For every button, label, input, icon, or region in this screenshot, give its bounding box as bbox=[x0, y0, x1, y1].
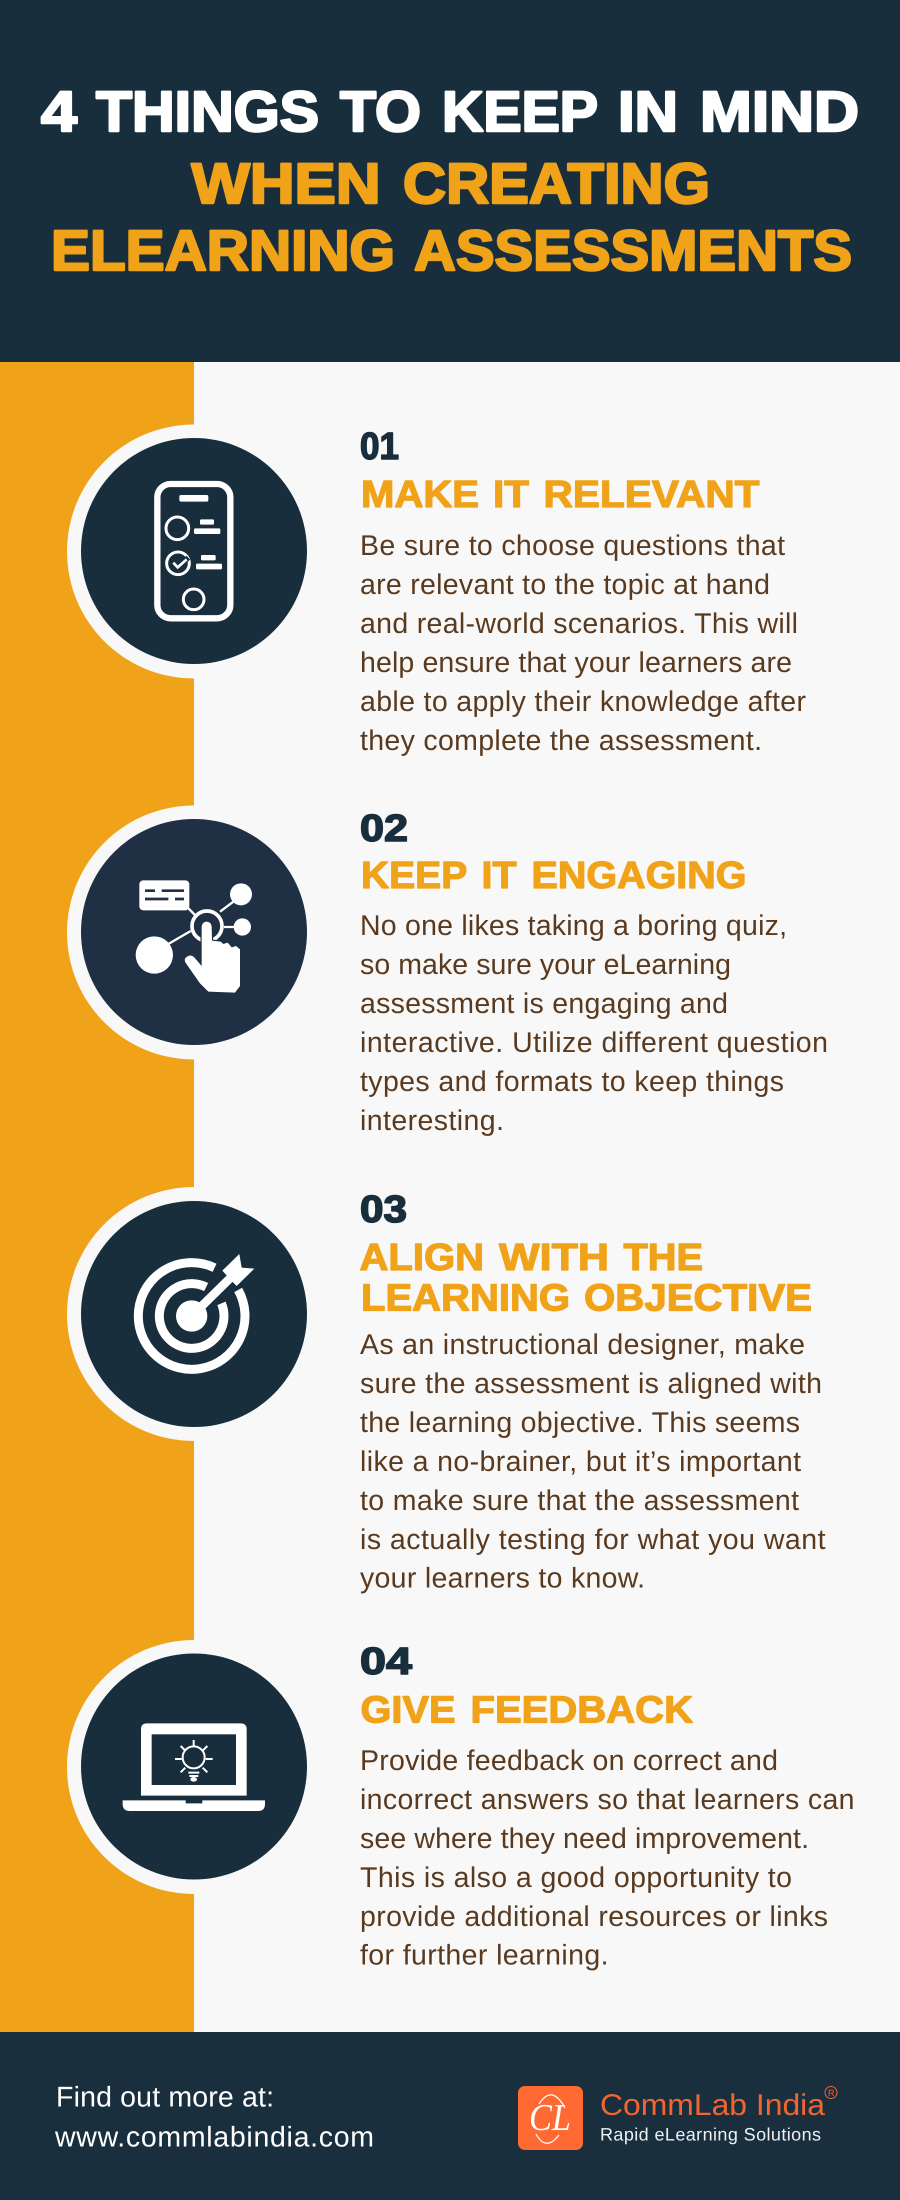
text block: align with the learning objective: to make sure that the assessment bbox=[360, 1485, 799, 1517]
heading: align with the learning objective: WITH bbox=[499, 1237, 609, 1279]
text block: align with the learning objective bbox=[360, 1329, 826, 1594]
text block: give feedback: incorrect answers so that learners can bbox=[360, 1784, 854, 1816]
panel: 01 make it relevant bbox=[67, 424, 806, 757]
panel: 02 keep it engaging bbox=[67, 806, 828, 1137]
footer link text: www.commlabindia.com bbox=[54, 2122, 374, 2154]
footer link text: Find out more at: bbox=[56, 2082, 274, 2114]
text block: make it relevant bbox=[360, 530, 806, 757]
heading: align with the learning objective bbox=[360, 1237, 812, 1320]
icon: CL badge bbox=[518, 2086, 583, 2150]
text block: give feedback bbox=[360, 1745, 854, 1972]
icon: CL badge: CL bbox=[529, 2097, 571, 2139]
text block: align with the learning objective: your learners to know. bbox=[360, 1562, 645, 1594]
text block: align with the learning objective: the learning objective. This seems bbox=[360, 1407, 800, 1439]
icon: phone quiz checklist bbox=[67, 424, 321, 678]
heading: align with the learning objective: LEARNING bbox=[361, 1278, 570, 1320]
number 03: 03 bbox=[360, 1189, 407, 1231]
text block: align with the learning objective: sure the assessment is aligned with bbox=[360, 1368, 822, 1400]
heading: keep it engaging: IT bbox=[482, 855, 516, 897]
text block: make it relevant: able to apply their knowledge after bbox=[360, 686, 806, 718]
text block: keep it engaging: assessment is engaging and bbox=[360, 988, 728, 1020]
text block: make it relevant: help ensure that your learners are bbox=[360, 647, 792, 679]
text block: keep it engaging: interactive. Utilize different question bbox=[360, 1027, 828, 1059]
title bbox=[41, 80, 859, 283]
registered mark bbox=[825, 2086, 837, 2098]
heading: align with the learning objective: OBJECTIVE bbox=[584, 1278, 812, 1320]
panel: 04 give feedback bbox=[67, 1640, 854, 1972]
text block: keep it engaging: No one likes taking a boring quiz, bbox=[360, 910, 787, 942]
text block: align with the learning objective: is actually testing for what you want bbox=[360, 1524, 826, 1556]
text block: make it relevant: they complete the assessment. bbox=[360, 725, 762, 757]
text block: give feedback: Provide feedback on correct and bbox=[360, 1745, 778, 1777]
title: WHEN bbox=[192, 152, 380, 216]
text block: give feedback: see where they need improvement. bbox=[360, 1823, 809, 1855]
title: MIND bbox=[700, 80, 859, 144]
panel: 03 align with the learning objective bbox=[67, 1187, 826, 1594]
title: IN bbox=[618, 80, 678, 144]
text block: make it relevant: and real-world scenarios. This will bbox=[360, 608, 798, 640]
text block: keep it engaging bbox=[360, 910, 828, 1137]
heading: keep it engaging: KEEP bbox=[361, 855, 467, 897]
title: KEEP bbox=[442, 80, 597, 144]
footer link text bbox=[54, 2082, 374, 2154]
heading: make it relevant: MAKE bbox=[361, 474, 479, 516]
heading: align with the learning objective: ALIGN bbox=[360, 1237, 484, 1279]
text block: keep it engaging: types and formats to keep things bbox=[360, 1066, 784, 1098]
icon: target with arrow bbox=[67, 1187, 321, 1441]
text block: keep it engaging: so make sure your eLearning bbox=[360, 949, 731, 981]
text block: align with the learning objective: As an instructional designer, make bbox=[360, 1329, 805, 1361]
title: ASSESSMENTS bbox=[414, 219, 852, 283]
title: TO bbox=[340, 80, 421, 144]
header banner bbox=[0, 0, 900, 362]
logo: CommLab India bbox=[518, 2086, 837, 2150]
heading: give feedback: GIVE bbox=[360, 1690, 456, 1732]
heading: align with the learning objective: THE bbox=[624, 1237, 703, 1279]
text block: align with the learning objective: like a no-brainer, but it’s important bbox=[360, 1446, 801, 1478]
text block: give feedback: for further learning. bbox=[360, 1940, 608, 1972]
icon: laptop with lightbulb bbox=[67, 1640, 321, 1894]
text block: make it relevant: are relevant to the topic at hand bbox=[360, 569, 770, 601]
brand name: CommLab India bbox=[600, 2089, 825, 2122]
heading: keep it engaging: ENGAGING bbox=[532, 855, 746, 897]
footer bbox=[0, 2032, 900, 2200]
text block: make it relevant: Be sure to choose questions that bbox=[360, 530, 785, 562]
icon: interactive hand tap network bbox=[67, 806, 321, 1060]
heading: make it relevant: RELEVANT bbox=[544, 474, 760, 516]
number 01: 01 bbox=[360, 426, 399, 468]
text block: keep it engaging: interesting. bbox=[360, 1105, 504, 1137]
tagline: Rapid eLearning Solutions bbox=[600, 2124, 821, 2144]
title: 4 bbox=[41, 80, 77, 144]
text block: give feedback: This is also a good opportunity to bbox=[360, 1862, 792, 1894]
title: THINGS bbox=[96, 80, 319, 144]
number 02: 02 bbox=[360, 808, 408, 850]
heading: give feedback: FEEDBACK bbox=[470, 1690, 694, 1732]
text block: give feedback: provide additional resources or links bbox=[360, 1901, 828, 1933]
title: CREATING bbox=[403, 152, 710, 216]
heading: make it relevant: IT bbox=[493, 474, 529, 516]
number 04: 04 bbox=[360, 1641, 412, 1683]
registered mark: R bbox=[828, 2088, 835, 2098]
title: ELEARNING bbox=[51, 219, 395, 283]
